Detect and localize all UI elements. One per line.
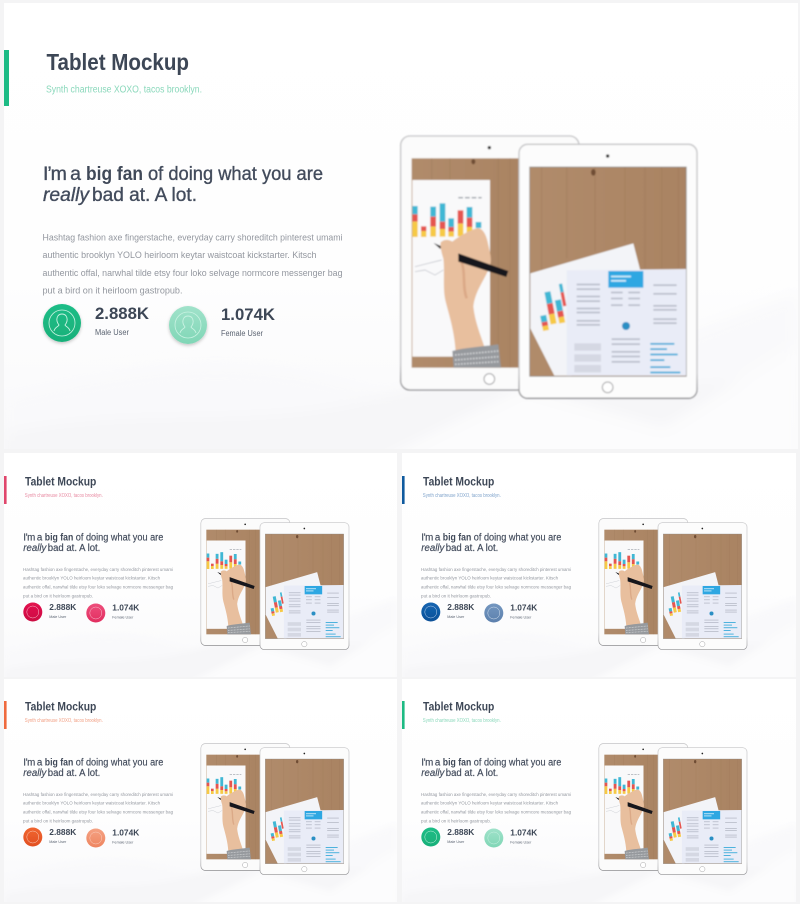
slide content: big fan: [443, 758, 471, 768]
slide content: put a bird on it heirloom gastropub.: [421, 818, 491, 823]
title: Tablet Mockup: [46, 49, 189, 75]
slide content: 2.888K: [447, 827, 475, 837]
tablets mockup: [599, 743, 747, 875]
slide content: authentic offal, narwhal tilde etsy four loko selvage normcore messenger bag: [421, 810, 572, 814]
slide content: Synth chartreuse XOXO, tacos brooklyn.: [423, 493, 501, 499]
slide content: Hashtag fashion axe fingerstache, everyday carry shoreditch pinterest umami: [23, 792, 173, 797]
slide content: 1.074K: [510, 602, 538, 612]
body paragraph: Hashtag fashion axe fingerstache, everyday carry shoreditch pinterest umami: [42, 232, 342, 242]
stat: female users: [221, 305, 276, 338]
slide content: really: [23, 768, 47, 779]
panel: orange slide: [4, 679, 397, 904]
slide content: Tablet Mockup: [25, 476, 96, 488]
panel: green small slide: [402, 679, 796, 904]
slide content: I’m a: [421, 532, 441, 544]
slide content: Male User: [447, 614, 465, 619]
slide content: really: [421, 543, 445, 554]
slide content: Tablet Mockup: [423, 702, 494, 714]
slide content: Hashtag fashion axe fingerstache, everyday carry shoreditch pinterest umami: [421, 567, 571, 572]
tablets mockup: [401, 136, 697, 398]
slide content: I’m a: [23, 532, 43, 544]
slide content: Hashtag fashion axe fingerstache, everyday carry shoreditch pinterest umami: [23, 567, 173, 572]
icon: male user: [43, 304, 81, 342]
slide content: [23, 476, 174, 622]
slide content: bad at. A lot.: [48, 768, 100, 779]
slide background: [402, 679, 796, 904]
stat: male users: 2.888K: [95, 304, 150, 323]
slide content: Male User: [49, 839, 67, 844]
stat: female users: Female User: [221, 329, 263, 338]
slide content: bad at. A lot.: [446, 543, 498, 554]
slide background: [4, 679, 397, 904]
slide content: I’m a: [23, 758, 43, 768]
heading: [43, 163, 323, 206]
slide content: of doing what you are: [474, 532, 561, 544]
slide content: Female User: [112, 840, 134, 844]
accent bar: [4, 701, 7, 729]
slide content: big fan: [45, 532, 73, 544]
slide content: Synth chartreuse XOXO, tacos brooklyn.: [423, 718, 501, 724]
slide background: [4, 453, 397, 689]
body paragraph: authentic offal, narwhal tilde etsy four loko selvage normcore messenger bag: [42, 268, 342, 278]
slide content: authentic brooklyn YOLO heirloom keytar waistcoat kickstarter. Kitsch: [421, 800, 559, 806]
slide content: I’m a: [421, 758, 441, 768]
slide content: 2.888K: [447, 602, 475, 612]
slide content: authentic offal, narwhal tilde etsy four loko selvage normcore messenger bag: [23, 810, 174, 814]
slide content: Male User: [49, 614, 67, 619]
accent bar: [4, 476, 7, 504]
slide content: Tablet Mockup: [25, 702, 96, 714]
accent bar: [402, 701, 405, 729]
heading: really: [43, 184, 90, 206]
slide content: 1.074K: [112, 602, 140, 612]
slide content: really: [421, 768, 445, 779]
icon: female user: [169, 306, 207, 344]
tablets mockup: [201, 743, 349, 875]
tablets mockup: [599, 518, 747, 650]
body paragraph: put a bird on it heirloom gastropub.: [42, 286, 182, 296]
slide content: 2.888K: [49, 602, 77, 612]
slide content: bad at. A lot.: [48, 543, 100, 554]
slide content: of doing what you are: [76, 532, 163, 544]
slide content: of doing what you are: [474, 758, 561, 768]
slide content: Hashtag fashion axe fingerstache, everyday carry shoreditch pinterest umami: [421, 792, 571, 797]
slide content: authentic brooklyn YOLO heirloom keytar waistcoat kickstarter. Kitsch: [23, 800, 161, 806]
heading: I’m a: [43, 163, 81, 185]
slide content: Synth chartreuse XOXO, tacos brooklyn.: [25, 493, 103, 499]
slide content: authentic brooklyn YOLO heirloom keytar waistcoat kickstarter. Kitsch: [421, 576, 559, 580]
slide content: Male User: [447, 839, 465, 844]
slide content: put a bird on it heirloom gastropub.: [23, 818, 93, 823]
slide content: Female User: [112, 614, 134, 620]
slide content: big fan: [443, 532, 471, 544]
slide content: put a bird on it heirloom gastropub.: [23, 593, 93, 598]
panel: main green slide: [4, 3, 798, 473]
slide content: 2.888K: [49, 827, 77, 837]
slide content: 1.074K: [112, 828, 140, 838]
subtitle: Synth chartreuse XOXO, tacos brooklyn.: [46, 84, 202, 96]
panel: red slide: [4, 453, 397, 689]
slide content: Tablet Mockup: [423, 476, 494, 488]
slide content: Female User: [510, 614, 532, 620]
stat: male users: [95, 304, 150, 337]
slide background: [4, 3, 798, 473]
slide content: really: [23, 543, 47, 554]
slide content: put a bird on it heirloom gastropub.: [421, 593, 491, 598]
slide content: authentic brooklyn YOLO heirloom keytar waistcoat kickstarter. Kitsch: [23, 576, 161, 580]
slide content: Female User: [510, 840, 532, 844]
accent bar: [402, 476, 405, 504]
body paragraph: [42, 232, 342, 296]
slide content: [421, 702, 572, 848]
slide content: 1.074K: [510, 828, 538, 838]
stat: male users: Male User: [95, 328, 129, 337]
slide content: big fan: [45, 758, 73, 768]
tablets mockup: [201, 518, 349, 650]
slide background: [402, 453, 796, 689]
slide content: [23, 702, 174, 848]
slide content: bad at. A lot.: [446, 768, 498, 779]
body paragraph: authentic brooklyn YOLO heirloom keytar waistcoat kickstarter. Kitsch: [42, 250, 316, 260]
heading: big fan: [86, 163, 143, 185]
slide content: of doing what you are: [76, 758, 163, 768]
slide content: authentic offal, narwhal tilde etsy four loko selvage normcore messenger bag: [421, 584, 572, 590]
heading: of doing what you are: [148, 163, 323, 185]
slide content: [421, 476, 572, 622]
heading: bad at. A lot.: [92, 184, 197, 206]
stat: female users: 1.074K: [221, 305, 276, 324]
panel: blue slide: [402, 453, 796, 689]
slide content: Synth chartreuse XOXO, tacos brooklyn.: [25, 718, 103, 724]
accent bar: [4, 50, 9, 106]
slide content: authentic offal, narwhal tilde etsy four loko selvage normcore messenger bag: [23, 584, 174, 590]
